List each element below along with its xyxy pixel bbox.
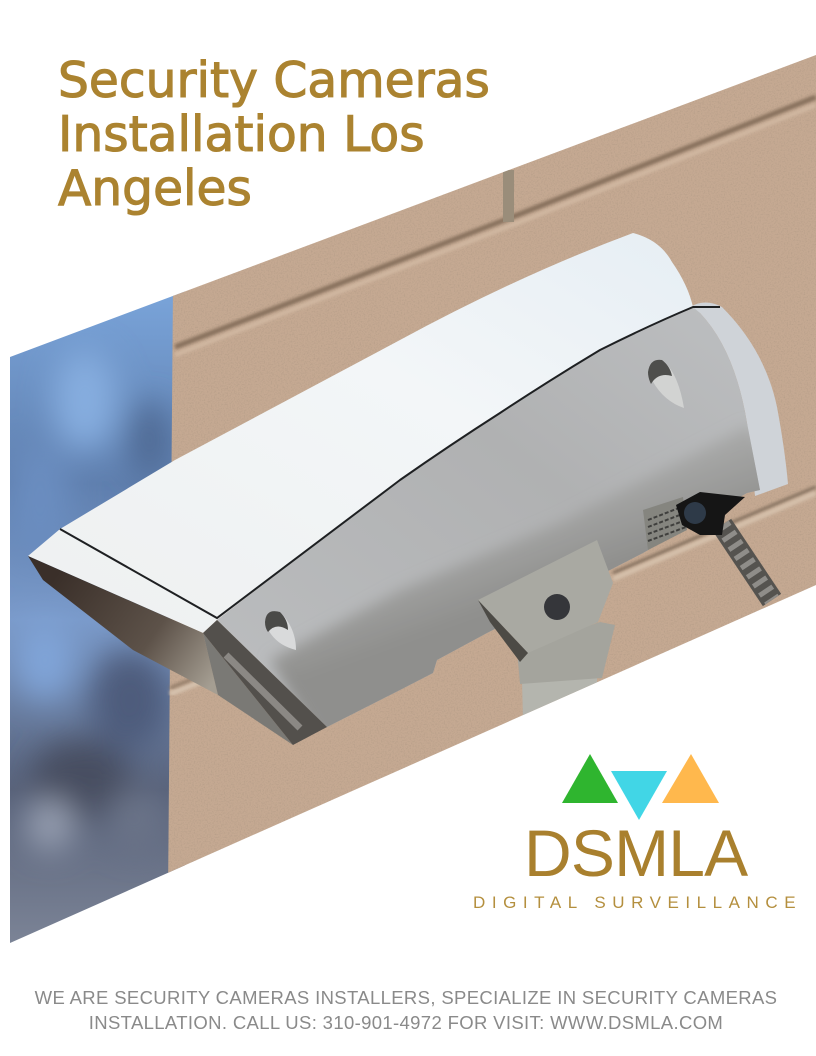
camera: mount bracket [478, 540, 613, 653]
title: Installation Los [58, 107, 425, 163]
footer text [34, 987, 777, 1033]
title: Angeles [58, 161, 252, 217]
camera: front ring [203, 620, 327, 745]
camera: ring highlight [226, 655, 300, 728]
camera: hood top [28, 233, 693, 633]
camera: vent [643, 497, 687, 550]
camera: fitting nut [684, 502, 706, 524]
vent slots [648, 506, 686, 541]
footer text: WE ARE SECURITY CAMERAS INSTALLERS, SPECIALIZE IN SECURITY CAMERAS [35, 987, 777, 1008]
logo: DSMLA [473, 754, 802, 912]
camera: lower screw hole [265, 611, 296, 650]
logo wordmark: DSMLA [524, 816, 747, 890]
camera: bolt [544, 594, 570, 620]
footer text: INSTALLATION. CALL US: 310-901-4972 FOR VISIT: WWW.DSMLA.COM [89, 1012, 723, 1033]
camera: conduit cable [722, 525, 772, 600]
icon: three triangles [562, 754, 719, 820]
logo tagline: DIGITAL SURVEILLANCE [473, 893, 802, 912]
camera: front underside [28, 556, 218, 695]
background: blurred sky [0, 280, 185, 960]
camera: perforated panel [203, 633, 293, 745]
camera: upper screw hole [648, 360, 684, 408]
title: Security Cameras [58, 53, 490, 109]
camera: mount neck [517, 622, 615, 684]
camera: body [217, 307, 760, 727]
camera: mount shadow [478, 600, 528, 662]
camera: seam lines [60, 307, 720, 618]
camera: rear cap [690, 302, 788, 496]
camera: pole [522, 678, 597, 715]
camera: cable fitting [676, 492, 745, 535]
title [58, 53, 490, 217]
background: brick wall [165, 40, 816, 900]
camera: body lower face [268, 428, 760, 727]
cable ribs [722, 525, 772, 600]
